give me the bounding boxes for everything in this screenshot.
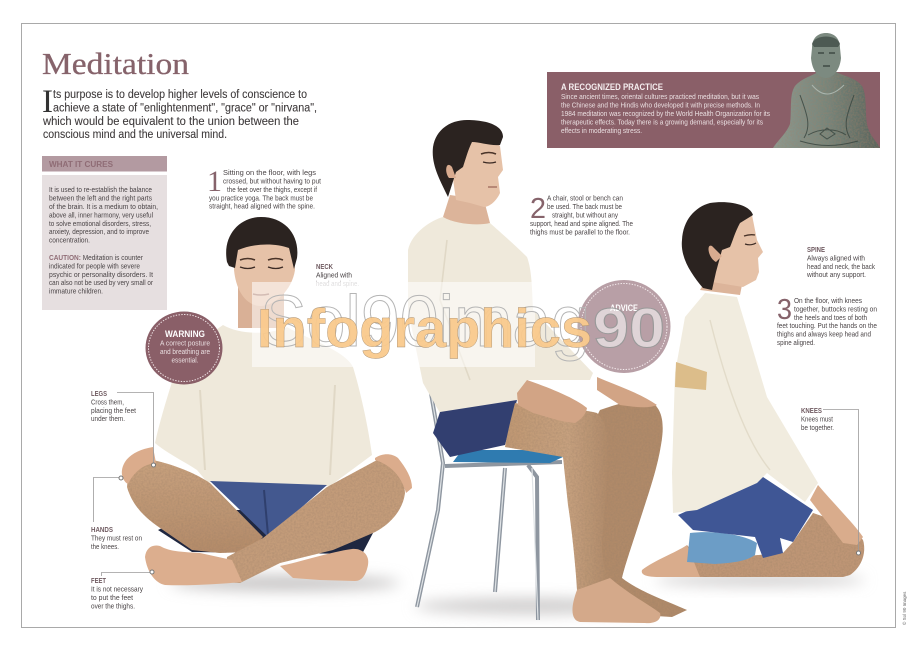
step 3 text: spine aligned.: [777, 340, 815, 347]
callout: warning badge: and breathing are: [160, 349, 210, 356]
callout: hands: [91, 476, 142, 551]
callout: hands: They must rest on: [91, 535, 142, 542]
callout: feet: over the thighs.: [91, 603, 135, 610]
panel: what it cures: between the left and the right parts: [49, 196, 152, 202]
step 1 text: [207, 165, 321, 211]
callout: spine: without any support.: [806, 272, 866, 279]
panel: what it cures: immature children.: [49, 289, 103, 296]
callout: feet: It is not necessary: [91, 587, 143, 594]
icon: buddha statue: [773, 33, 880, 148]
watermark: Sol90imag: [260, 282, 590, 362]
panel: a recognized practice: [547, 72, 880, 148]
hair: [433, 120, 503, 197]
step 2 text: [530, 193, 633, 236]
panel: a recognized practice: 1984 meditation was recognized by the World Health Organization for its: [561, 111, 770, 118]
step 3 text: feet touching. Put the hands on the: [777, 323, 877, 330]
panel: what it cures: to solve emotional disorders, stress,: [49, 221, 151, 228]
callout: neck: NECK: [316, 264, 333, 271]
callout: spine: SPINE: [807, 247, 825, 254]
shorts: [678, 477, 813, 558]
step 3 text: thighs and always keep head and: [777, 332, 871, 339]
step 2 text: support, head and spine aligned. The: [530, 221, 633, 228]
shorts: [433, 400, 517, 457]
back band: [675, 362, 707, 390]
figure 3: man kneeling: [642, 202, 865, 586]
callout: spine: Always aligned with: [807, 255, 865, 262]
panel: what it cures: above all, inner harmony, very useful: [49, 212, 153, 219]
title: Meditation: [42, 46, 190, 81]
step 2 text: straight, but without any: [552, 212, 618, 220]
shirt: [155, 325, 372, 486]
hands: [122, 447, 156, 484]
panel: what it cures: [42, 156, 167, 310]
shorts: [210, 481, 327, 537]
leg: [687, 513, 864, 577]
panel: a recognized practice: Since ancient times, oriental cultures practiced meditation, but it was: [561, 94, 759, 101]
panel: what it cures: concentration.: [49, 238, 90, 245]
step 2 text: 2: [530, 193, 546, 225]
callout: neck: head and spine.: [316, 281, 359, 288]
step 2 text: thighs must be parallel to the floor.: [530, 230, 630, 236]
callout: legs: [91, 391, 156, 467]
panel: what it cures: It is used to re-establish the balance: [49, 187, 152, 194]
panel: what it cures: of the brain. It is a medium to obtain,: [49, 204, 158, 211]
leg left: [127, 460, 263, 553]
callout: advice badge: ADVICE: [610, 303, 638, 313]
intro text: achieve a state of "enlightenment", "grace" or "nirvana",: [53, 100, 317, 114]
panel: what it cures: anxiety, depression, and to improve: [49, 229, 149, 236]
callout: spine: head and neck, the back: [807, 264, 875, 271]
callout: legs: under them.: [91, 416, 125, 423]
shirt: [672, 293, 818, 513]
panel: what it cures: can also not be used by very small or: [49, 280, 154, 287]
neck: [238, 282, 284, 328]
callout: warning badge: A correct posture: [160, 340, 210, 348]
face: [234, 242, 295, 306]
neck: [443, 195, 490, 224]
step 2 text: A chair, stool or bench can: [547, 196, 623, 202]
intro text: ts purpose is to develop higher levels of conscience to: [53, 87, 307, 101]
watermark: Infographics: [257, 297, 592, 359]
credit: © Sol 90 Images: [901, 591, 907, 625]
panel: a recognized practice: the Chinese and the Hindis who developed it with precise methods. In: [561, 102, 760, 110]
callout: neck: [316, 264, 359, 288]
far leg: [585, 400, 687, 617]
intro text: [42, 84, 317, 141]
foot: [642, 545, 700, 577]
callout: feet: to put the feet: [91, 595, 133, 602]
step 1 text: 1: [207, 165, 222, 198]
callout: legs: placing the feet: [91, 408, 136, 415]
intro text: conscious mind and the universal mind.: [43, 127, 227, 141]
hands: [517, 380, 587, 423]
face: [706, 215, 763, 287]
neck: [700, 270, 743, 295]
leg right: [225, 460, 405, 583]
near foot: [572, 578, 660, 623]
callout: warning badge: WARNING: [165, 329, 205, 339]
step 3 text: [777, 294, 877, 347]
callout: warning badge: essential.: [172, 358, 199, 364]
far foot: [280, 549, 368, 581]
step 3 text: together, buttocks resting on: [794, 306, 877, 313]
step 3 text: 3: [777, 294, 792, 326]
hair: [226, 217, 297, 269]
panel: what it cures: WHAT IT CURES: [49, 160, 114, 169]
panel: a recognized practice: therapeutic effects. Today there is a growing demand, especially for its: [561, 120, 763, 126]
chair frame: [417, 370, 562, 620]
intro text: I: [42, 84, 53, 120]
chair seat: [453, 450, 563, 463]
callout: knees: Knees must: [801, 416, 833, 423]
callout: hands: the knees.: [91, 544, 119, 551]
callout: hands: HANDS: [91, 527, 113, 534]
step 3 text: the heels and toes of both: [794, 315, 867, 322]
shirt: [408, 217, 593, 413]
intro text: which would be equivalent to the union between the: [42, 114, 299, 128]
callout: neck: Aligned with: [316, 272, 352, 280]
callout: feet: FEET: [91, 578, 107, 585]
hair: [682, 202, 753, 290]
step 1 text: the feet over the thighs, except if: [227, 187, 317, 194]
panel: a recognized practice: effects in moderating stress.: [561, 128, 642, 135]
callout: warning badge: [146, 312, 222, 384]
panel: what it cures: psychic or personality disorders. It: [49, 272, 153, 279]
shorts back pieces: [158, 510, 373, 554]
figure 2: man seated on chair: [408, 120, 687, 623]
near leg: [505, 403, 610, 590]
figure 1: seated cross-legged man: [122, 217, 412, 591]
panel: what it cures: CAUTION: Meditation is counter: [49, 255, 144, 262]
callout: knees: [801, 408, 860, 555]
hand: [810, 485, 863, 545]
callout: spine: [806, 247, 875, 279]
callout: knees: be together.: [801, 425, 834, 432]
cushion: [687, 532, 757, 564]
callout: legs: LEGS: [91, 391, 107, 398]
step 1 text: crossed, but without having to put: [223, 178, 321, 186]
face: [452, 142, 503, 207]
panel: a recognized practice: A RECOGNIZED PRACTICE: [561, 82, 663, 92]
callout: advice badge: [578, 280, 670, 373]
callout: feet: [91, 570, 154, 610]
step 1 text: straight, head aligned with the spine.: [209, 204, 315, 211]
callout: legs: Cross them,: [91, 399, 124, 406]
panel: what it cures: indicated for people with severe: [49, 263, 140, 270]
step 3 text: On the floor, with knees: [794, 298, 862, 305]
near foot: [145, 545, 242, 585]
callout: knees: KNEES: [801, 408, 822, 415]
watermark: 90: [593, 296, 665, 359]
step 2 text: be used. The back must be: [547, 204, 622, 211]
step 1 text: you practice yoga. The back must be: [209, 195, 313, 202]
step 1 text: Sitting on the floor, with legs: [223, 170, 317, 177]
